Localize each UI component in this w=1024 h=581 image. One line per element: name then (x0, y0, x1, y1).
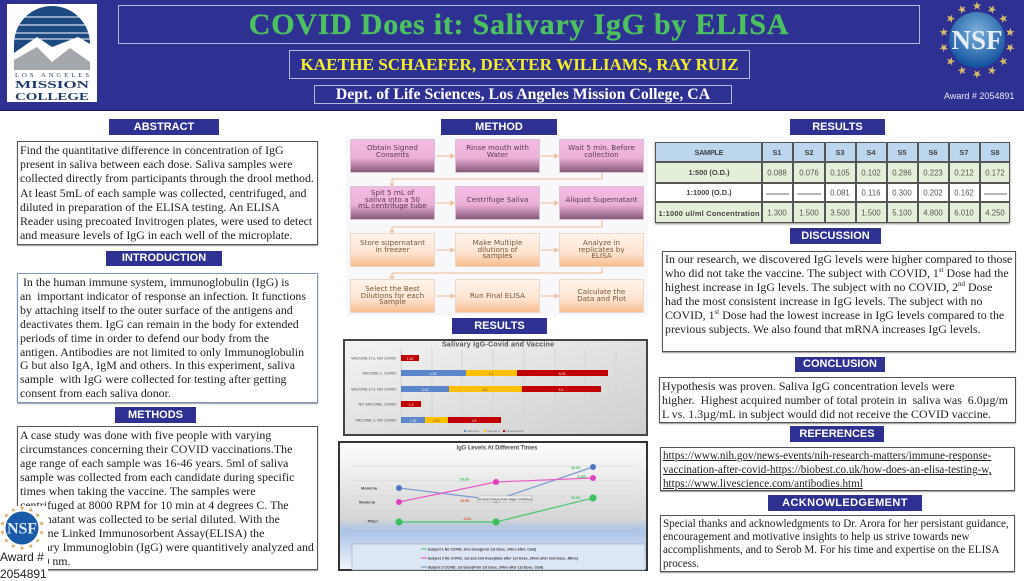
data table: 5.100 (892, 208, 912, 218)
line chart: IgG Levels At Different Times: -3.3% (463, 517, 471, 521)
icon: NSF logo overlay with award number: 2054891 (0, 567, 47, 581)
text block: methods (17, 426, 318, 570)
step 4: Spit 5 mL of (371, 188, 414, 197)
icon: NSF logo: NSF (951, 25, 1003, 55)
heading: discussion (790, 228, 881, 244)
step 5 (455, 186, 540, 220)
bar chart: Salivary IgG-Covid and Vaccine: 1.45 (407, 357, 413, 361)
text block: discussion: highest increase in IgG levels. The subject with no COVID, 2nd Dose (665, 280, 992, 294)
logo: Los Angeles Mission College (7, 4, 97, 102)
step 8: dilutions of (478, 245, 517, 254)
text block: methods: sample was collected from each candidate during specific (20, 470, 294, 484)
text block: discussion: In our research, we discovered IgG levels were higher compared to those (665, 252, 1012, 266)
text block: methods: at 450 nm. (20, 554, 71, 568)
text block: abstract: Find the quantitative difference in concentration of IgG (20, 143, 284, 157)
bar chart: Salivary IgG-Covid and Vaccine: Final Sample (506, 429, 524, 433)
step 9: replicates by (578, 245, 625, 254)
data table: 0.202 (923, 188, 943, 198)
heading: results right: RESULTS (812, 120, 863, 132)
text block: discussion: previous subjects. We also found that mRNA increases IgG levels. (665, 322, 981, 336)
flowchart: method steps (346, 136, 648, 316)
text block: methods: A case study was done with five people with varying (20, 428, 271, 442)
bar chart: Salivary IgG-Covid and Vaccine: 1.35 (410, 419, 416, 423)
heading: acknowledgement (768, 495, 922, 511)
data table: 0.076 (799, 168, 819, 178)
step 10 (350, 279, 435, 313)
step 4 (350, 186, 435, 220)
heading: results center (452, 318, 547, 334)
step 11 (455, 279, 540, 313)
step 1 (350, 139, 435, 173)
bar chart: Salivary IgG-Covid and Vaccine: 5.6 (483, 388, 487, 392)
text block: conclusion: higher. Highest acquired number of total protein in saliva was 6.0µg/m (662, 393, 1008, 407)
step 12 (559, 279, 644, 313)
icon: NSF logo overlay with award number (0, 506, 48, 581)
authors (289, 50, 750, 79)
text block: methods: supernatant was collected to be serial diluted. With the (20, 512, 280, 526)
text block: abstract: At least 5mL of each sample was collected, centrifuged, and (20, 186, 306, 200)
bar chart: Salivary IgG-Covid and Vaccine: 4.35 (430, 372, 436, 376)
text block: introduction (17, 273, 318, 403)
data table: S1 (772, 148, 782, 157)
step 10: Sample (379, 297, 406, 306)
heading: abstract (109, 119, 219, 135)
text block: methods: Salivary Immunoglobin (IgG) were quantitively analyzed and (20, 540, 314, 554)
text block: abstract: and measure levels of IgG in each well of the microplate. (20, 228, 292, 242)
step 9: Analyze in (583, 238, 620, 247)
award number: Award # 2054891 (944, 91, 1014, 101)
data table: 0.081 (830, 188, 850, 198)
authors: KAETHE SCHAEFER, DEXTER WILLIAMS, RAY RUIZ (300, 55, 739, 74)
data table: 3.500 (830, 208, 850, 218)
data table: 4.250 (985, 208, 1005, 218)
heading: references: REFERENCES (799, 428, 875, 440)
text block: abstract: Reader using precoated Invitrogen plates, were used to detect (20, 214, 312, 228)
heading: methods (115, 407, 196, 423)
text block: methods: age range of each sample was 16-46 years. 5ml of saliva (20, 456, 288, 470)
step 2: Water (487, 150, 508, 159)
line chart: IgG Levels At Different Times: 40.9% (460, 499, 470, 503)
logo: Los Angeles Mission College: LOS ANGELES (15, 72, 89, 79)
step 2 (455, 139, 540, 173)
bar chart: Salivary IgG-Covid and Vaccine: Salivary IgG-Covid and Vaccine (442, 342, 554, 348)
data table: S3 (835, 148, 845, 157)
data table: 1:1000 (O.D.) (686, 188, 732, 197)
text block: methods: circumstances concerning their COVID vaccinations.The (20, 442, 292, 456)
data table: 0.286 (892, 168, 912, 178)
data table: 4.800 (923, 208, 943, 218)
heading: introduction: INTRODUCTION (122, 252, 206, 264)
text block: methods: centrifuged at 8000 RPM for 10 min at 4 degrees C. The (20, 498, 289, 512)
data table: 0.102 (861, 168, 881, 178)
text block: acknowledgement: Special thanks and acknowledgments to Dr. Arora for her persistant guidance, (663, 518, 1009, 530)
step 9: ELISA (591, 251, 612, 260)
step 12: Calculate the (578, 287, 625, 296)
text block: abstract: diluted in preparation of the ELISA testing. An ELISA (20, 200, 280, 214)
text block: references: https://www.livescience.com/antibodies.html (663, 478, 863, 490)
step 8 (455, 233, 540, 267)
line chart: IgG Levels At Different Times: Subject 1 No COVID, One Dose(prior 1st Dose, 24hrs after, Cadi) (428, 548, 536, 552)
text block: introduction: periods of time in order to defend our body from the (20, 331, 269, 345)
bar chart: Salivary IgG-Covid and Vaccine (343, 339, 648, 436)
heading: references (790, 426, 884, 442)
bar chart: Salivary IgG-Covid and Vaccine: NO VACCINE, COVID (359, 402, 396, 406)
step 7 (350, 233, 435, 267)
data table: 0.212 (954, 168, 974, 178)
heading: conclusion (795, 357, 885, 372)
step 10: Select the Best (365, 284, 420, 293)
step 1: Obtain Signed (367, 143, 418, 152)
text block: discussion: had the most consistent increase in IgG levels. The subject with no (665, 294, 982, 308)
data table: 0.162 (954, 188, 974, 198)
text block: conclusion: L vs. 1.3µg/mL in subject would did not receive the COVID vaccine. (662, 407, 991, 421)
text block: abstract: collected directly from participants through the drool method. (20, 171, 314, 185)
bar chart: Salivary IgG-Covid and Vaccine: Sample 1 (467, 429, 480, 433)
step 11: Run Final ELISA (470, 291, 525, 300)
bar chart: Salivary IgG-Covid and Vaccine: 5.2 (559, 388, 563, 392)
step 6: Aliquot Supernatant (565, 195, 638, 204)
heading: discussion: DISCUSSION (801, 230, 870, 242)
header banner (0, 0, 1024, 111)
step 6 (559, 186, 644, 220)
text block: abstract (17, 141, 318, 245)
data table: 1:500 (O.D.) (688, 168, 730, 177)
line chart: IgG Levels At Different Times: Pfizer (368, 520, 379, 524)
step 3: collection (584, 150, 619, 159)
icon: NSF logo overlay with award number: Award # (0, 550, 44, 564)
text block: introduction: antigen. Antibodies are not limited to only Immunoglobulin (20, 345, 304, 359)
step 10: Dilutions for each (361, 291, 424, 300)
data table: S7 (959, 148, 969, 157)
data table: 1.500 (799, 208, 819, 218)
data table: 0.116 (862, 188, 880, 198)
line chart: IgG Levels At Different Times: Vertical (Value) Axis Major Gridlines (478, 498, 532, 502)
text block: acknowledgement (660, 515, 1015, 572)
text block: methods: times when taking the vaccine. The samples were (20, 484, 256, 498)
text block: conclusion: Hypothesis was proven. Saliva IgG concentration levels were (662, 379, 955, 393)
heading: introduction (106, 251, 222, 266)
bar chart: Salivary IgG-Covid and Vaccine: 1.53 (433, 419, 439, 423)
line chart: IgG Levels At Different Times: Subject 3 COVID, 1st Dose(Prior 1st Dose, 24hrs after 1st Dose, Cadi) (428, 566, 543, 570)
bar chart: Salivary IgG-Covid and Vaccine: VACCINE 1, NO COVID (355, 418, 396, 422)
title (118, 5, 920, 44)
heading: conclusion: CONCLUSION (803, 358, 877, 370)
bar chart: Salivary IgG-Covid and Vaccine: 6.05 (559, 372, 565, 376)
text block: introduction: sample with IgG were collected for testing after getting (20, 372, 286, 386)
step 8: samples (483, 251, 512, 260)
heading: methods: METHODS (128, 408, 183, 420)
heading: acknowledgement: ACKNOWLEDGEMENT (782, 496, 908, 508)
text block: discussion: who did not take the vaccine. The subject with COVID, 1st Dose had the (665, 266, 1009, 280)
data table: 0.172 (985, 168, 1005, 178)
data table: 0.105 (830, 168, 850, 178)
bar chart: Salivary IgG-Covid and Vaccine: VACCINE 1, COVID (362, 372, 396, 376)
bar chart: Salivary IgG-Covid and Vaccine: 1.3 (409, 403, 413, 407)
heading: method: METHOD (475, 120, 523, 132)
text block: discussion (662, 251, 1016, 352)
data table: 1.500 (861, 208, 881, 218)
bar chart: Salivary IgG-Covid and Vaccine: VACCINE 1+2, NO COVID (351, 356, 396, 360)
text block: discussion: COVID, 1st Dose had the lowest increase in IgG levels compared to the (665, 308, 1004, 322)
text block: introduction: an important indicator of response an infection. It functions (20, 289, 306, 303)
text block: acknowledgement: encouragement and motivative insights to help us strive towards new (663, 531, 970, 543)
step 3 (559, 139, 644, 173)
bar chart: Salivary IgG-Covid and Vaccine: 3.45 (422, 388, 428, 392)
data table (655, 142, 1010, 223)
data table: 0.223 (923, 168, 943, 178)
text block: introduction: consent from each saliva donor. (20, 386, 171, 400)
text block: acknowledgement: accomplishments, and to Serob M. For his time and expertise on the ELISA (663, 544, 999, 556)
text block: references: https://www.nih.gov/news-events/nih-research-matters/immune-response- (663, 450, 991, 462)
department: Dept. of Life Sciences, Los Angeles Mission College, CA (336, 86, 710, 103)
text block: abstract: present in saliva between each dose. Saliva samples were (20, 157, 292, 171)
bar chart: Salivary IgG-Covid and Vaccine: Sample 2 (487, 429, 500, 433)
heading: results center: RESULTS (474, 320, 525, 332)
text block: conclusion (659, 377, 1016, 423)
step 4: mL centrifuge tube (358, 201, 427, 210)
data table: S4 (866, 148, 876, 157)
logo: Los Angeles Mission College: MISSION (15, 79, 89, 91)
heading: abstract: ABSTRACT (134, 120, 194, 132)
data table: S5 (897, 148, 907, 157)
step 1: Consents (376, 150, 409, 159)
text block: introduction: deactivates them. IgG can remain in the body for extended (20, 317, 299, 331)
text block: references: vaccination-after-covid-https://biobest.co.uk/how-does-an-elisa-testing-w, (663, 464, 991, 476)
step 9 (559, 233, 644, 267)
title: COVID Does it: Salivary IgG by ELISA (249, 8, 789, 40)
line chart: IgG Levels At Different Times: 53.8% (460, 478, 470, 482)
line chart: IgG Levels At Different Times: 6.45% (577, 475, 587, 479)
data table: S6 (928, 148, 938, 157)
line chart: IgG Levels At Different Times (338, 441, 648, 571)
text block: methods: Enzyme Linked Immunosorbent Assay(ELISA) the (20, 526, 264, 540)
line chart: IgG Levels At Different Times: Moderna (359, 500, 376, 504)
data table: 1.300 (767, 208, 787, 218)
step 7: in freezer (375, 245, 410, 254)
step 5: Centrifuge Saliva (467, 195, 528, 204)
step 7: Store supernatant (360, 238, 425, 247)
step 3: Wait 5 min. Before (568, 143, 635, 152)
heading: method (441, 119, 557, 135)
icon: NSF logo (940, 2, 1014, 78)
line chart: IgG Levels At Different Times: Subject 2 No COVID, 1st and 2nd Dose(Date after 1st Dose, 24hrs after 2nd Dose, 48hrs) (428, 556, 578, 560)
text block: introduction: by attaching itself to the outer surface of the antigens and (20, 303, 293, 317)
text block: references (660, 447, 1015, 491)
step 8: Make Multiple (473, 238, 522, 247)
bar chart: Salivary IgG-Covid and Vaccine: 3.1 (489, 372, 493, 376)
step 12: Data and Plot (577, 294, 626, 303)
data table: 1:1000 ul/ml Concentration (658, 209, 760, 218)
step 2: Rinse mouth with (466, 143, 529, 152)
text block: acknowledgement: process. (663, 558, 699, 570)
line chart: IgG Levels At Different Times: 53.2% (571, 496, 581, 500)
line chart: IgG Levels At Different Times: Moderna (361, 486, 378, 490)
line chart: IgG Levels At Different Times: IgG Levels At Different Times (456, 446, 538, 452)
text block: introduction: In the human immune system, immunoglobulin (IgG) is (23, 275, 289, 289)
data table: 6.010 (954, 208, 974, 218)
data table: 0.300 (892, 188, 912, 198)
data table: 0.088 (767, 168, 787, 178)
icon: NSF logo overlay with award number: NSF (7, 520, 37, 537)
data table: S2 (804, 148, 814, 157)
line chart: IgG Levels At Different Times: 60.2% (571, 466, 581, 470)
step 4: saliva into a 50 (365, 195, 420, 204)
bar chart: Salivary IgG-Covid and Vaccine: VACCINE 1+2, NO COVID (351, 388, 396, 392)
data table: S8 (990, 148, 1000, 157)
heading: results right (790, 119, 885, 135)
text block: introduction: G but also IgA, IgM and others. In this experiment, saliva (20, 358, 295, 372)
data table: SAMPLE (694, 148, 724, 157)
bar chart: Salivary IgG-Covid and Vaccine: 3.5 (472, 419, 476, 423)
